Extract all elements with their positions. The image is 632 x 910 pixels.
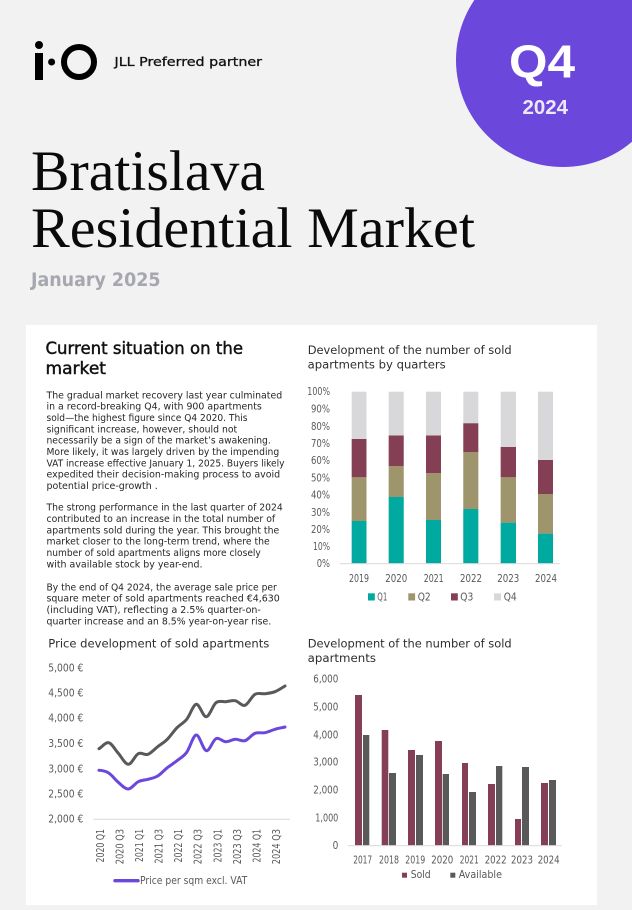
chart title: number of sold apartments: Development of the number of sold	[308, 637, 512, 651]
x axis labels	[353, 856, 560, 867]
legend: quarters	[368, 592, 517, 603]
x axis labels	[96, 829, 283, 864]
heading: current situation: Current situation on the	[46, 339, 243, 358]
text block: paragraph 1: in a record-breaking Q4, with 900 apartments	[46, 402, 262, 413]
bars: sold	[355, 695, 548, 845]
x axis labels	[349, 574, 557, 585]
legend: quarters: Q3	[460, 592, 473, 603]
x axis labels: 2021	[460, 856, 479, 867]
text block: paragraph 1: VAT increase effective January 1, 2025. Buyers likely	[46, 458, 285, 469]
y axis labels: 60%	[311, 456, 330, 467]
y axis labels	[307, 387, 330, 570]
y axis labels: 1,000	[315, 814, 338, 825]
heading: current situation: market	[46, 359, 107, 378]
text block: paragraph 2: with available stock by year-end.	[46, 559, 202, 570]
text block: paragraph 1	[46, 390, 285, 492]
y axis labels: 40%	[311, 491, 330, 502]
y axis labels: 100%	[307, 387, 330, 398]
panel: sold apartments by quarters chart	[307, 343, 560, 603]
y axis labels: 5,000	[313, 702, 338, 713]
text block: paragraph 1: expedited their decision-making process to avoid	[46, 470, 280, 481]
x axis labels: 2019	[405, 856, 425, 867]
x axis labels: 2023 Q3	[233, 829, 244, 864]
legend: sold and available: Sold	[411, 870, 431, 881]
text block: paragraph 3: By the end of Q4 2024, the average sale price per	[46, 582, 277, 593]
x axis labels: 2021 Q1	[135, 829, 146, 862]
text block: paragraph 1: potential price-growth .	[46, 481, 158, 492]
y axis labels: 30%	[311, 508, 330, 519]
y axis labels: 10%	[313, 542, 330, 553]
date: January 2025	[29, 270, 160, 291]
chart title: by quarters: apartments by quarters	[308, 357, 446, 371]
text block: paragraph 1: necessarily be a sign of the market’s awakening.	[46, 436, 271, 447]
y axis labels: 2,500 €	[48, 790, 83, 801]
bars: available	[363, 735, 556, 845]
y axis labels: 3,000 €	[48, 764, 83, 775]
chart title: by quarters: Development of the number of sold	[308, 343, 512, 357]
y axis labels: 6,000	[313, 674, 338, 685]
text block: paragraph 3: (including VAT), reflecting a 2.5% quarter-on-	[46, 605, 261, 616]
legend: quarters: Q1	[377, 592, 387, 603]
text block: paragraph 1: More likely, it was largely driven by the impending	[46, 447, 279, 458]
y axis labels	[48, 664, 83, 826]
text block: paragraph 2: contributed to an increase in the total number of	[46, 514, 276, 525]
title: Residential Market	[31, 197, 475, 260]
text block: paragraph 3: square meter of sold apartments reached €4,630	[46, 594, 280, 605]
x axis labels: 2022 Q1	[174, 829, 185, 862]
x axis labels: 2024 Q3	[272, 829, 283, 864]
line: price per sqm excl. VAT	[99, 727, 285, 789]
x axis labels: 2022 Q3	[194, 829, 205, 864]
x axis labels: 2022	[460, 574, 482, 585]
x axis labels: 2022	[485, 856, 507, 867]
y axis labels: 4,000 €	[48, 714, 83, 725]
y axis labels: 50%	[311, 473, 330, 484]
legend: price per sqm: Price per sqm excl. VAT	[140, 876, 248, 887]
y axis labels: 5,000 €	[48, 664, 83, 675]
legend: quarters: Q2	[418, 592, 431, 603]
text block: paragraph 1: sold—the highest figure since Q4 2020. This	[46, 413, 248, 424]
x axis labels: 2020 Q1	[96, 829, 107, 862]
x axis labels: 2020	[431, 856, 453, 867]
y axis labels: 2,000	[313, 786, 338, 797]
text block: paragraph 3: quarter increase and an 8.5% year-on-year rise.	[46, 616, 271, 627]
partner label: JLL Preferred partner	[113, 54, 263, 69]
text block: paragraph 3	[46, 582, 280, 627]
chart title: by quarters	[308, 343, 512, 371]
y axis labels: 0	[333, 841, 338, 852]
y axis labels: 70%	[311, 439, 330, 450]
x axis labels: 2020	[385, 574, 407, 585]
heading: current situation	[46, 339, 243, 378]
icon: i-O logo	[35, 41, 94, 80]
x axis labels: 2021	[424, 574, 444, 585]
quarter badge	[456, 0, 632, 167]
y axis labels: 3,000	[313, 758, 338, 769]
y axis labels: 2,000 €	[48, 815, 83, 826]
y axis labels	[313, 674, 338, 852]
text block: paragraph 2: market closer to the long-term trend, where the	[46, 537, 270, 548]
text block: paragraph 2	[46, 503, 283, 570]
x axis labels: 2023	[497, 574, 519, 585]
y axis labels: 20%	[311, 525, 330, 536]
quarter badge: 2024	[522, 97, 569, 119]
y axis labels: 0%	[317, 559, 330, 570]
y axis labels: 3,500 €	[48, 739, 83, 750]
panel: current situation text	[46, 339, 285, 627]
text block: paragraph 2: number of sold apartments aligns more closely	[46, 548, 261, 559]
x axis labels: 2017	[353, 856, 372, 867]
legend: sold and available	[402, 870, 502, 881]
y axis labels: 80%	[311, 422, 330, 433]
panel: sold vs available bar chart	[308, 637, 562, 881]
title	[31, 140, 475, 260]
chart title: number of sold apartments	[308, 637, 512, 665]
x axis labels: 2023	[511, 856, 533, 867]
quarter badge: Q4	[509, 36, 575, 88]
x axis labels: 2021 Q3	[155, 829, 166, 864]
y axis labels: 4,000	[313, 731, 338, 742]
line: price including VAT	[99, 686, 285, 764]
y axis labels: 90%	[311, 405, 330, 416]
stacked bars	[352, 392, 553, 563]
chart title: number of sold apartments: apartments	[308, 651, 376, 665]
text block: paragraph 2: The strong performance in the last quarter of 2024	[46, 503, 283, 514]
legend: sold and available: Available	[459, 870, 502, 881]
x axis labels: 2024	[538, 856, 560, 867]
text block: paragraph 1: The gradual market recovery last year culminated	[46, 390, 282, 401]
y axis labels: 4,500 €	[48, 689, 83, 700]
panel: price development line chart	[48, 637, 290, 887]
x axis labels: 2018	[379, 856, 399, 867]
legend: quarters: Q4	[504, 592, 517, 603]
text block: paragraph 1: significant increase, however, should not	[46, 424, 237, 435]
x axis labels: 2020 Q3	[115, 829, 126, 864]
x axis labels: 2024 Q1	[253, 829, 264, 862]
x axis labels: 2019	[349, 574, 369, 585]
x axis labels: 2024	[535, 574, 557, 585]
x axis labels: 2023 Q1	[213, 829, 224, 862]
title: Bratislava	[31, 140, 265, 203]
panel: white content card	[26, 325, 597, 905]
text block: paragraph 2: apartments sold during the year. This brought the	[46, 525, 279, 536]
chart title: price development: Price development of sold apartments	[48, 637, 269, 651]
